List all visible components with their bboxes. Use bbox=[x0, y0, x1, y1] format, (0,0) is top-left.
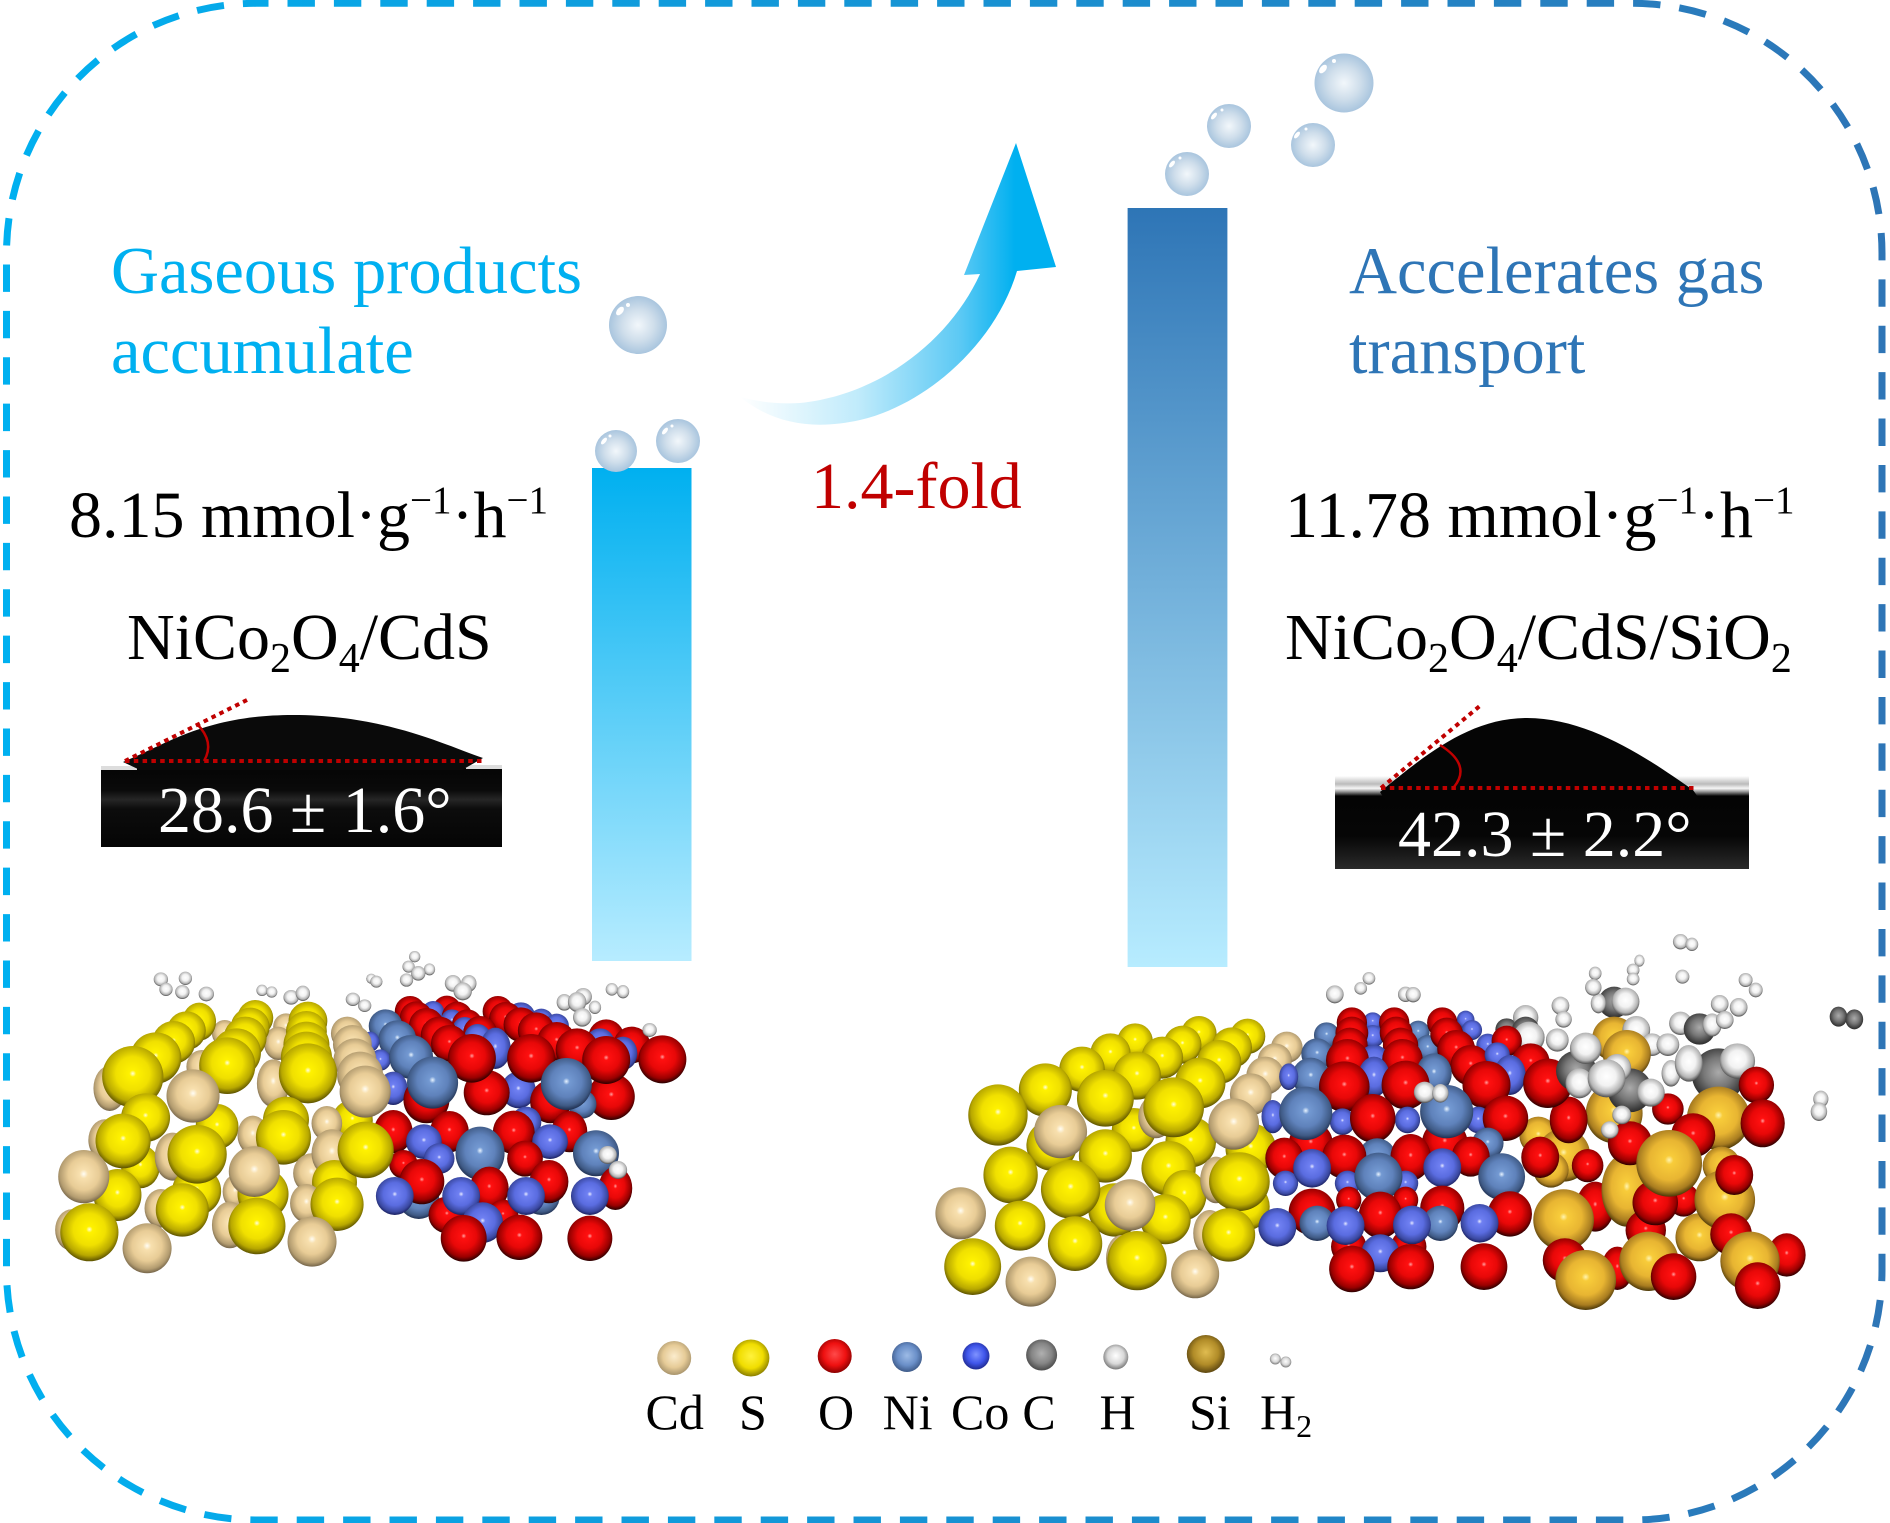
organic front and hydrogen molecules bbox=[1326, 934, 1863, 1139]
right catalyst label: /CdS/SiO bbox=[1518, 601, 1771, 674]
left catalyst label: /CdS bbox=[360, 601, 492, 674]
right heading: Accelerates gas transport: Accelerates gas bbox=[1349, 235, 1764, 308]
legend: Ni: Ni bbox=[883, 1384, 933, 1440]
contact angle image: left: 28.6 ± 1.6° bbox=[158, 774, 452, 847]
contact angle image: left bbox=[101, 700, 502, 847]
bar: NiCo2O4/CdS/SiO2 bbox=[1128, 208, 1227, 967]
right rate value: 11.78 mmol·g bbox=[1285, 479, 1657, 552]
left rate value: 8.15 mmol·g bbox=[69, 479, 410, 552]
legend: Cd bbox=[646, 1341, 704, 1440]
bubbles over right bar bbox=[1165, 54, 1374, 196]
right catalyst label: 4 bbox=[1497, 636, 1518, 682]
right rate value: −1 bbox=[1753, 479, 1795, 522]
left catalyst label: O bbox=[291, 601, 339, 674]
right rate value: −1 bbox=[1657, 479, 1698, 522]
legend: Co: Co bbox=[951, 1384, 1009, 1440]
oxide layer bbox=[361, 996, 686, 1262]
right catalyst label: NiCo bbox=[1285, 601, 1428, 674]
right catalyst label: O bbox=[1449, 601, 1497, 674]
legend: O bbox=[818, 1339, 854, 1440]
CdS layer bbox=[55, 1000, 394, 1273]
legend: S bbox=[732, 1340, 769, 1440]
legend: Ni bbox=[883, 1342, 933, 1440]
left rate value: −1 bbox=[410, 479, 452, 522]
contact angle image: right bbox=[1335, 705, 1749, 871]
legend: Si: Si bbox=[1189, 1384, 1231, 1440]
hydrogen molecules bbox=[154, 951, 657, 1179]
legend: Si bbox=[1187, 1335, 1231, 1440]
molecular model: NiCo2O4/CdS bbox=[55, 951, 686, 1273]
fold change label: 1.4-fold bbox=[811, 450, 1022, 523]
CdS layer bbox=[935, 1016, 1303, 1307]
legend: H2 bbox=[1260, 1354, 1312, 1444]
gray and white organic layer bbox=[1495, 987, 1755, 1102]
legend: Co bbox=[951, 1342, 1009, 1440]
bubbles over left bar bbox=[595, 296, 700, 472]
legend bbox=[646, 1335, 1312, 1444]
molecular model: NiCo2O4/CdS/SiO2 bbox=[935, 934, 1863, 1310]
contact angle image: right: 42.3 ± 2.2° bbox=[1398, 798, 1692, 871]
right heading: Accelerates gas transport: transport bbox=[1349, 315, 1586, 388]
right rate value: ·h bbox=[1698, 479, 1753, 552]
legend: Cd: Cd bbox=[646, 1384, 704, 1440]
bar: NiCo2O4/CdS bbox=[592, 468, 692, 961]
left heading: Gaseous products accumulate: Gaseous products bbox=[111, 235, 582, 308]
left catalyst label: 2 bbox=[270, 636, 291, 682]
silica layer bbox=[1519, 1030, 1806, 1310]
left rate value: −1 bbox=[506, 479, 548, 522]
oxide layer bbox=[1258, 1007, 1572, 1292]
legend: C: C bbox=[1022, 1384, 1056, 1440]
legend: H: H bbox=[1100, 1384, 1136, 1440]
legend: O: O bbox=[818, 1384, 854, 1440]
curved growth arrow bbox=[740, 143, 1056, 425]
right catalyst label: 2 bbox=[1771, 636, 1792, 682]
legend: H2: 2 bbox=[1296, 1408, 1312, 1444]
right catalyst label: 2 bbox=[1428, 636, 1449, 682]
left catalyst label: 4 bbox=[339, 636, 360, 682]
left rate value: ·h bbox=[452, 479, 506, 552]
left catalyst label: NiCo bbox=[127, 601, 270, 674]
legend: H bbox=[1100, 1344, 1136, 1440]
legend: C bbox=[1022, 1340, 1057, 1440]
legend: H2: H bbox=[1260, 1384, 1296, 1440]
legend: S: S bbox=[739, 1384, 767, 1440]
left heading: Gaseous products accumulate: accumulate bbox=[111, 315, 414, 388]
